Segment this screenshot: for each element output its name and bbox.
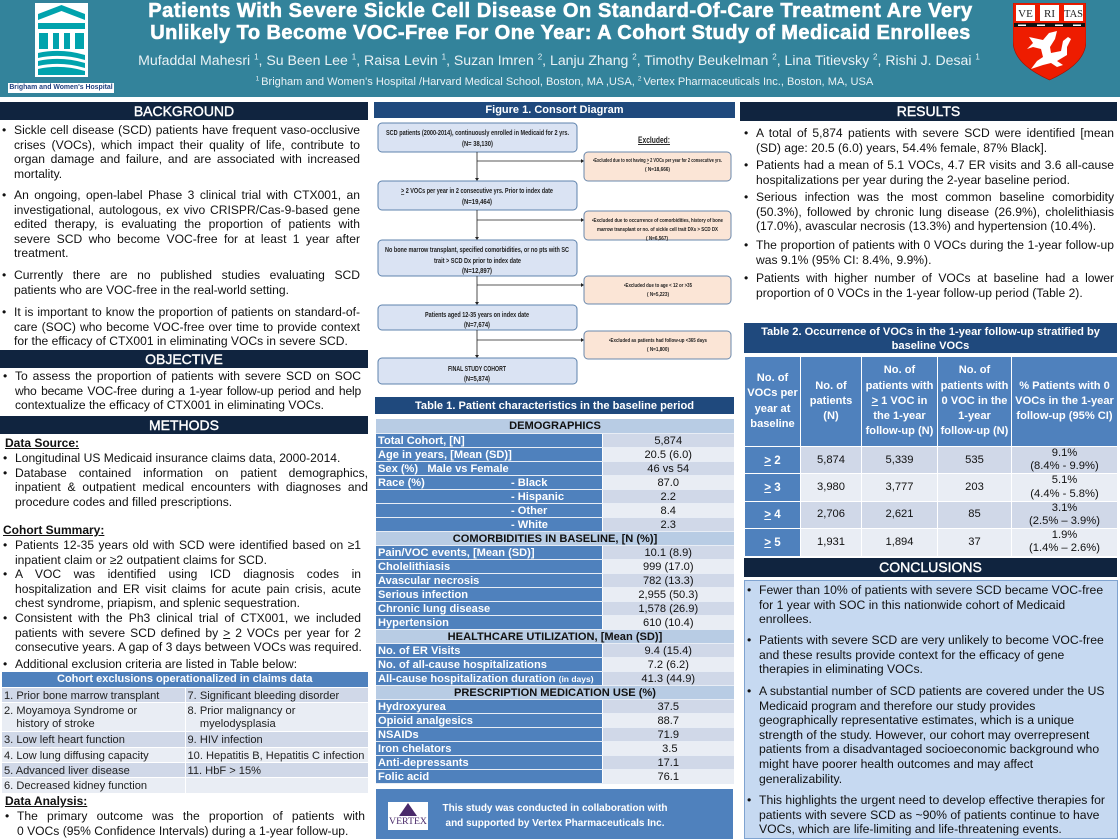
conclusions body: • bbox=[747, 684, 751, 698]
table: characteristics: Sex (%) Male vs Female bbox=[378, 463, 509, 475]
heading: methods: METHODS bbox=[149, 417, 219, 433]
text: data source: inpatient & outpatient medical encounters with diagnoses and bbox=[15, 480, 368, 494]
icon: Vertex logo: VERTEX bbox=[389, 816, 428, 826]
table: stratified VOCs: (8.4% - 9.9%) bbox=[1030, 460, 1099, 472]
text: urgent need: patients with severe SCD as ~90% of patients continue to have bbox=[759, 808, 1099, 822]
table: characteristics: 2.2 bbox=[661, 491, 676, 503]
text: very unlikely: and these results provide context for the efficacy of gene bbox=[759, 648, 1064, 662]
table: characteristics: 8.4 bbox=[661, 505, 676, 517]
table: stratified VOCs: (2.5% – 3.9%) bbox=[1029, 515, 1100, 527]
table: characteristics: 999 (17.0) bbox=[643, 561, 694, 573]
panel: methods: • bbox=[3, 451, 7, 465]
flow diagram: marrow transplant or no. of sickle cell trait DXs > SCD DX bbox=[597, 227, 718, 233]
table: cohort exclusions: 3. Low left heart function bbox=[4, 734, 125, 746]
table: stratified VOCs: follow-up (N) bbox=[941, 425, 1008, 437]
flow diagram: (N=7,674) bbox=[464, 322, 490, 329]
panel: background: • bbox=[2, 188, 6, 202]
conclusions body: • bbox=[747, 633, 751, 647]
text: cohort summary: Consistent with the Ph3 clinical trial of CTX001, we included bbox=[15, 611, 361, 625]
table: characteristics: Age in years, [Mean (SD)] bbox=[378, 449, 512, 461]
table: stratified VOCs: the 1-year bbox=[873, 410, 926, 422]
heading: table 2: Table 2. Occurrence of VOCs in the 1-year follow-up stratified by bbox=[761, 326, 1100, 338]
text: data analysis bbox=[5, 809, 365, 838]
panel: figure 1 consort diagram bbox=[374, 102, 735, 384]
table: characteristics: 10.1 (8.9) bbox=[644, 547, 692, 559]
text: SCD overview: Sickle cell disease (SCD) patients have frequent vaso-occlusive bbox=[14, 123, 360, 137]
table: characteristics: No. of ER Visits bbox=[378, 645, 460, 657]
table: characteristics: 9.4 (15.4) bbox=[644, 645, 692, 657]
text: importance bbox=[2, 305, 360, 348]
table: cohort exclusions: 6. Decreased kidney function bbox=[4, 780, 147, 792]
flow diagram: ( N=18,666) bbox=[645, 167, 670, 173]
text: phase 3 trial: treatment. bbox=[14, 246, 68, 260]
table: cohort exclusions: 9. HIV infection bbox=[188, 734, 263, 746]
table: characteristics: 37.5 bbox=[657, 701, 679, 713]
text: comorbidities: (50.3%), followed by chronic lung disease (26.9%), cholelithiasis bbox=[756, 205, 1114, 219]
flow diagram: (N=5,874) bbox=[464, 376, 490, 383]
table: characteristics: PRESCRIPTION MEDICATION USE (%) bbox=[454, 687, 656, 699]
table: stratified VOCs: 2,706 bbox=[817, 508, 845, 520]
table: stratified VOCs: No. of bbox=[884, 364, 915, 376]
icon: Harvard shield: VE bbox=[1018, 8, 1033, 20]
text: phase 3 trial bbox=[2, 188, 360, 260]
panel: table 1 patient characteristics bbox=[375, 397, 734, 784]
table: characteristics: 1,578 (26.9) bbox=[638, 603, 698, 615]
table: stratified VOCs: (N) bbox=[823, 410, 839, 422]
authors: Mufaddal Mahesri 1, Su Been Lee 1, Raisa Levin 1, Suzan Imren 2, Lanju Zhang 2, Timothy Beukelman 2, Lina Titievsky 2, Rishi J. Desai 1 bbox=[138, 52, 980, 68]
table: characteristics: 5,874 bbox=[654, 435, 682, 447]
table: stratified VOCs: 3.1% bbox=[1052, 502, 1077, 514]
logo caption: Brigham and Women's Hospital bbox=[9, 84, 113, 91]
table: characteristics: - Black bbox=[511, 477, 547, 489]
flow diagram bbox=[378, 122, 732, 384]
panel: results: • bbox=[744, 158, 748, 172]
text: no published studies bbox=[2, 268, 360, 297]
table: characteristics: DEMOGRAPHICS bbox=[509, 420, 601, 432]
text: cohort summary: chest syndrome, priapism, and splenic sequestration. bbox=[15, 596, 300, 610]
text: fewer than 10%: for 1 year with SOC in this nationwide cohort of Medicaid bbox=[759, 598, 1065, 612]
table: cohort exclusions: history of stroke bbox=[16, 718, 95, 730]
panel: results bbox=[740, 102, 1117, 300]
conclusions body: • bbox=[747, 793, 751, 807]
table: stratified VOCs: VOCs per bbox=[747, 387, 798, 399]
text: cohort summary: A VOC was identified using ICD diagnosis codes in bbox=[15, 567, 361, 581]
heading: figure 1: Figure 1. Consort Diagram bbox=[485, 104, 624, 116]
text: very unlikely bbox=[747, 633, 1104, 676]
table: stratified VOCs: No. of bbox=[959, 364, 990, 376]
table: characteristics: Race (%) bbox=[378, 477, 425, 489]
table: cohort exclusions: Cohort exclusions operationalized in claims data bbox=[57, 673, 313, 685]
text: data source: procedure codes and filled prescriptions. bbox=[15, 495, 232, 509]
text: Medicaid strength: might have poorer health outcomes and may affect bbox=[759, 757, 1033, 771]
table: stratified VOCs: 5.1% bbox=[1052, 474, 1077, 486]
table: stratified VOCs: (1.4% – 2.6%) bbox=[1029, 542, 1100, 554]
text: patient count: (SD) age: 20.5 (6.0) years, 54.4% female, 87% Black]. bbox=[756, 141, 1047, 155]
table: characteristics: NSAIDs bbox=[378, 729, 419, 741]
table: cohort exclusions: 7. Significant bleeding disorder bbox=[188, 690, 339, 702]
table: characteristics: COMORBIDITIES IN BASELINE, [N (%)] bbox=[453, 533, 657, 545]
table: stratified VOCs: baseline bbox=[750, 418, 795, 430]
table: stratified VOCs: patients bbox=[810, 395, 852, 407]
heading: table 1: Table 1. Patient characteristics in the baseline period bbox=[415, 400, 694, 412]
panel: methods: • bbox=[3, 567, 7, 581]
text: patient count bbox=[744, 126, 1114, 155]
table: characteristics: 87.0 bbox=[657, 477, 679, 489]
text: phase 3 trial: edited therapy, is evaluating the proportion of patients with bbox=[14, 217, 360, 231]
table: stratified VOCs: follow-up (95% CI) bbox=[1016, 410, 1113, 422]
table: characteristics: 88.7 bbox=[657, 715, 679, 727]
table: stratified VOCs: > 4 bbox=[764, 508, 781, 521]
text: baseline VOCs bbox=[744, 158, 1114, 187]
flow diagram: No bone marrow transplant, specified comorbidities, or no pts with SC bbox=[385, 247, 569, 254]
text: Medicaid strength: A substantial number of SCD patients are covered under the US bbox=[759, 684, 1105, 698]
text: Medicaid strength: patients from a disadvantaged socioeconomic background who bbox=[759, 742, 1099, 756]
table: stratified VOCs: 37 bbox=[968, 536, 981, 548]
panel: background: • bbox=[2, 123, 6, 137]
panel: methods: • bbox=[3, 466, 7, 480]
text: data analysis: The primary outcome was the proportion of patients with bbox=[17, 809, 365, 823]
heading: cohort summary: Cohort Summary: bbox=[3, 523, 104, 537]
table: characteristics: Hydroxyurea bbox=[378, 701, 446, 713]
table: characteristics: 610 (10.4) bbox=[643, 617, 694, 629]
title bbox=[148, 0, 973, 44]
heading: results: RESULTS bbox=[897, 103, 960, 119]
text: Medicaid strength: geographically representative estimates, which is a unique bbox=[759, 713, 1074, 727]
table: stratified VOCs: follow-up (N) bbox=[866, 425, 933, 437]
table: stratified VOCs: 5,339 bbox=[886, 454, 914, 466]
table: stratified VOCs: 3,980 bbox=[817, 481, 845, 493]
heading: objective: OBJECTIVE bbox=[145, 351, 223, 367]
text: SCD overview: mortality. bbox=[14, 167, 62, 181]
text: higher VOCs: proportion of 0 VOCs in the 1-year follow-up period (Table 2). bbox=[756, 286, 1083, 300]
table: characteristics: Avascular necrosis bbox=[378, 575, 479, 587]
heading: conclusions bbox=[744, 558, 1117, 577]
text: objective bbox=[3, 369, 361, 412]
text: urgent need: This highlights the urgent need to develop effective therapies for bbox=[759, 793, 1105, 807]
logo caption bbox=[8, 83, 114, 93]
flow diagram: •Excluded due to occurrence of comorbidities, history of bone bbox=[592, 218, 723, 224]
heading: table 2 bbox=[744, 323, 1117, 353]
table: stratified VOCs: 9.1% bbox=[1052, 447, 1077, 459]
text: objective: To assess the proportion of patients with severe SCD on SOC bbox=[15, 369, 361, 383]
table: stratified VOCs: 1.9% bbox=[1052, 529, 1077, 541]
flow diagram: •Excluded as patients had follow-up <365 days bbox=[609, 338, 707, 344]
text: proportion with 0 VOCs: was 9.1% (95% CI: 8.4%, 9.9%). bbox=[756, 253, 931, 267]
table: cohort exclusions: 2. Moyamoya Syndrome or bbox=[4, 705, 137, 717]
text: proportion with 0 VOCs bbox=[744, 238, 1114, 267]
text: Medicaid strength: generalizability. bbox=[759, 772, 842, 786]
table: stratified VOCs: 1,931 bbox=[817, 536, 845, 548]
heading: table 2: baseline VOCs bbox=[892, 340, 969, 352]
panel: methods: • bbox=[3, 538, 7, 552]
icon: Harvard shield bbox=[1013, 3, 1086, 80]
heading: data analysis: Data Analysis: bbox=[5, 794, 87, 808]
panel: vertex acknowledgement bbox=[376, 789, 733, 839]
table: stratified VOCs: 0 VOC in the bbox=[942, 395, 1007, 407]
heading: background bbox=[0, 102, 368, 120]
table: cohort exclusions: 11. HbF > 15% bbox=[188, 765, 261, 777]
text: very unlikely: therapies in eliminating VOCs. bbox=[759, 662, 923, 676]
table: characteristics: 782 (13.3) bbox=[643, 575, 694, 587]
table: stratified VOCs: > 3 bbox=[764, 481, 781, 494]
heading: background: BACKGROUND bbox=[134, 103, 234, 119]
text: cohort summary: Additional exclusion criteria are listed in Table below: bbox=[15, 657, 297, 671]
icon: Vertex logo bbox=[388, 802, 428, 830]
flow diagram: FINAL STUDY COHORT bbox=[448, 366, 507, 373]
text: objective: contextualize the efficacy of CTX001 in eliminating VOCs. bbox=[15, 398, 324, 412]
table: stratified VOCs: 3,777 bbox=[886, 481, 914, 493]
text: urgent need: VOCs, which are life-limiting and life-threatening events. bbox=[759, 822, 1062, 836]
table: stratified VOCs: No. of bbox=[757, 372, 788, 384]
text: patient count: A total of 5,874 patients with severe SCD were identified [mean bbox=[756, 126, 1114, 140]
table: characteristics: 2.3 bbox=[661, 519, 676, 531]
text: cohort summary: consecutive years. A gap of 3 days between VOCs was required. bbox=[15, 640, 362, 654]
table: stratified VOCs: year at bbox=[755, 402, 790, 414]
text: urgent need bbox=[747, 793, 1105, 836]
flow diagram: ( N=5,223) bbox=[647, 292, 669, 298]
table: characteristics: Serious infection bbox=[378, 589, 468, 601]
flow diagram: > 2 VOCs per year in 2 consecutive yrs. Prior to index date bbox=[401, 188, 553, 195]
text: study collaboration note bbox=[442, 803, 668, 829]
text: Medicaid strength: strength of the study. However, our cohort may overrepresent bbox=[759, 728, 1089, 742]
table: characteristics: Chronic lung disease bbox=[378, 603, 490, 615]
panel: results: • bbox=[744, 126, 748, 140]
text: fewer than 10%: Fewer than 10% of patients with severe SCD became VOC-free bbox=[759, 583, 1103, 597]
title: Unlikely To Become VOC-Free For One Year: A Cohort Study of Medicaid Enrollees bbox=[150, 22, 971, 44]
table: characteristics: HEALTHCARE UTILIZATION, [Mean (SD)] bbox=[448, 631, 662, 643]
table: stratified VOCs: 1,894 bbox=[886, 536, 914, 548]
table: characteristics: Opioid analgesics bbox=[378, 715, 473, 727]
table: characteristics: Folic acid bbox=[378, 771, 429, 783]
panel: table 2 VOC occurrence bbox=[744, 323, 1117, 556]
table: characteristics: Hypertension bbox=[378, 617, 449, 629]
table: stratified VOCs: VOCs in the 1-year bbox=[1015, 395, 1114, 407]
heading: conclusions: CONCLUSIONS bbox=[879, 559, 982, 575]
header banner bbox=[0, 0, 1120, 97]
flow diagram: (N=19,464) bbox=[462, 199, 492, 206]
panel: methods: • bbox=[5, 809, 9, 823]
heading: methods bbox=[0, 416, 368, 434]
flow diagram: Patients aged 12-35 years on index date bbox=[425, 312, 529, 319]
table: characteristics: 41.3 (44.9) bbox=[641, 673, 695, 685]
text: importance: for the efficacy of CTX001 in eliminating VOCs in severe SCD. bbox=[14, 334, 348, 348]
table: characteristics: No. of all-cause hospitalizations bbox=[378, 659, 547, 671]
table: cohort exclusions: 5. Advanced liver disease bbox=[4, 765, 130, 777]
icon: Harvard shield: TAS bbox=[1064, 9, 1083, 20]
table: cohort exclusions: 8. Prior malignancy or bbox=[188, 705, 295, 717]
flow diagram: (N=12,897) bbox=[462, 268, 492, 275]
panel: methods bbox=[0, 416, 368, 838]
flow diagram: trait > SCD Dx prior to index date bbox=[434, 258, 521, 265]
flow diagram: •Excluded due to age < 12 or >35 bbox=[624, 283, 692, 289]
text: phase 3 trial: investigational, autologous, ex vivo CRISPR/Cas-9-based gene bbox=[14, 203, 360, 217]
panel: results: • bbox=[744, 238, 748, 252]
text: fewer than 10%: enrollees. bbox=[759, 612, 812, 626]
panel: background bbox=[0, 102, 368, 348]
text: cohort summary bbox=[3, 538, 362, 671]
table: stratified VOCs: No. of bbox=[815, 380, 847, 392]
heading: table 1 bbox=[375, 397, 734, 414]
text: cohort summary: hospitalization and ER visit claims for acute pain crisis, acute bbox=[15, 582, 361, 596]
text: importance: care (SOC) who become VOC-free over time to provide context bbox=[14, 320, 360, 334]
table: characteristics: Total Cohort, [N] bbox=[378, 435, 465, 447]
table: stratified VOCs: 85 bbox=[968, 508, 981, 520]
table: stratified VOCs bbox=[745, 357, 1117, 556]
table: stratified VOCs: 5,874 bbox=[817, 454, 845, 466]
text: proportion with 0 VOCs: The proportion of patients with 0 VOCs during the 1-year follow-up bbox=[756, 238, 1114, 252]
text: higher VOCs: Patients with higher number of VOCs at baseline had a lower bbox=[756, 271, 1114, 285]
icon: Brigham and Women's Hospital logo bbox=[35, 3, 88, 77]
table: stratified VOCs: patients with bbox=[866, 380, 933, 392]
table: stratified VOCs: 1-year bbox=[958, 410, 991, 422]
panel: results: • bbox=[744, 190, 748, 204]
table: characteristics: Anti-depressants bbox=[378, 757, 469, 769]
heading: data source: Data Source: bbox=[5, 436, 79, 450]
table: cohort exclusions: 10. Hepatitis B, Hepatitis C infection bbox=[188, 750, 364, 762]
text: comorbidities bbox=[744, 190, 1114, 233]
text: no published studies: patients who are VOC-free in the real-world setting. bbox=[14, 283, 289, 297]
text: data analysis: 0 VOCs (95% Confidence Intervals) during a 1-year follow-up. bbox=[17, 824, 348, 838]
affiliations: 1 Brigham and Women's Hospital /Harvard Medical School, Boston, MA ,USA, 2 Vertex Pharmaceuticals Inc., Boston, MA, USA bbox=[256, 75, 873, 88]
panel: results: • bbox=[744, 271, 748, 285]
text: SCD overview: organ damage and failure, and are associated with increased bbox=[14, 152, 360, 166]
flow diagram: ( N=6,567) bbox=[646, 236, 668, 242]
icon: Harvard shield: RI bbox=[1044, 8, 1055, 20]
table: characteristics: 71.9 bbox=[657, 729, 679, 741]
flow diagram: Excluded: bbox=[638, 135, 670, 146]
text: cohort summary: patients with severe SCD defined by > 2 VOCs per year for 2 bbox=[15, 626, 361, 640]
text: comorbidities: (17.0%), avascular necrosis (13.3%) and hypertension (10.4%). bbox=[756, 219, 1096, 233]
table: characteristics: 20.5 (6.0) bbox=[644, 449, 692, 461]
panel: methods: • bbox=[3, 657, 7, 671]
table: stratified VOCs: patients with bbox=[941, 380, 1008, 392]
table: characteristics: All-cause hospitalization duration (in days) bbox=[378, 673, 594, 685]
text: cohort summary: inpatient claim or ≥2 outpatient claims for SCD. bbox=[15, 553, 267, 567]
text: comorbidities: Serious infection was the most common baseline comorbidity bbox=[756, 190, 1114, 204]
flow diagram: ( N=1,800) bbox=[647, 347, 669, 353]
table: characteristics: - Other bbox=[511, 505, 547, 517]
text: data source: Database contained information on patient demographics, bbox=[15, 466, 368, 480]
table: stratified VOCs: % Patients with 0 bbox=[1019, 380, 1110, 392]
table: cohort exclusions: myelodysplasia bbox=[200, 718, 276, 730]
table: characteristics: 7.2 (6.2) bbox=[648, 659, 689, 671]
table: characteristics: Cholelithiasis bbox=[378, 561, 450, 573]
heading: figure 1 bbox=[374, 102, 735, 118]
table: stratified VOCs: 203 bbox=[965, 481, 984, 493]
table: characteristics: - Hispanic bbox=[511, 491, 564, 503]
text: SCD overview: crises (VOCs), which impact their quality of life, contribute to bbox=[14, 138, 360, 152]
title: Patients With Severe Sickle Cell Disease On Standard-Of-Care Treatment Are Very bbox=[148, 0, 973, 22]
table: characteristics: 3.5 bbox=[662, 743, 678, 755]
table: stratified VOCs: 535 bbox=[965, 454, 984, 466]
table: characteristics: - White bbox=[511, 519, 548, 531]
table: stratified VOCs: (4.4% - 5.8%) bbox=[1030, 488, 1099, 500]
text: data source bbox=[3, 451, 368, 509]
table: characteristics: Pain/VOC events, [Mean (SD)] bbox=[378, 547, 535, 559]
table: stratified VOCs: > 1 VOC in bbox=[872, 395, 927, 407]
table: characteristics: 76.1 bbox=[657, 771, 679, 783]
text: very unlikely: Patients with severe SCD are very unlikely to become VOC-free bbox=[759, 633, 1104, 647]
text: cohort summary: Patients 12-35 years old with SCD were identified based on ≥1 bbox=[15, 538, 361, 552]
table: characteristics: Iron chelators bbox=[378, 743, 451, 755]
panel: methods: • bbox=[3, 611, 7, 625]
text: data source: Longitudinal US Medicaid insurance claims data, 2000-2014. bbox=[15, 451, 340, 465]
table: cohort exclusions bbox=[2, 672, 368, 793]
text: Medicaid strength bbox=[747, 684, 1105, 786]
flow diagram: SCD patients (2000-2014), continuously enrolled in Medicaid for 2 yrs. bbox=[386, 130, 569, 137]
text: baseline VOCs: hospitalizations per year during the 2-year baseline period. bbox=[756, 173, 1070, 187]
table: stratified VOCs: > 5 bbox=[764, 536, 781, 549]
conclusions body: • bbox=[747, 583, 751, 597]
text: Medicaid strength: Medicaid program and therefore our study provides bbox=[759, 699, 1035, 713]
table: characteristics: 46 vs 54 bbox=[647, 463, 689, 475]
text: SCD overview bbox=[2, 123, 360, 181]
text: study collaboration note: and supported by Vertex Pharmaceuticals Inc. bbox=[446, 818, 664, 829]
panel: background: • bbox=[2, 305, 6, 319]
table: stratified VOCs: 2,621 bbox=[886, 508, 914, 520]
heading: results bbox=[740, 102, 1117, 121]
flow diagram: •Excluded due to not having > 2 VOCs per year for 2 consecutive yrs. bbox=[593, 158, 722, 164]
panel: objective bbox=[0, 350, 368, 412]
text: study collaboration note: This study was conducted in collaboration with bbox=[442, 803, 668, 814]
text: no published studies: Currently there are no published studies evaluating SCD bbox=[14, 268, 360, 282]
table: cohort exclusions: 1. Prior bone marrow transplant bbox=[4, 690, 159, 702]
conclusions body bbox=[744, 580, 1118, 839]
text: phase 3 trial: severe SCD who become VOC-free for at least 1 year after bbox=[14, 232, 360, 246]
panel: objective: • bbox=[3, 369, 7, 383]
table: stratified VOCs: > 2 bbox=[764, 454, 781, 467]
panel: background: • bbox=[2, 268, 6, 282]
text: fewer than 10% bbox=[747, 583, 1103, 626]
panel: conclusions bbox=[744, 558, 1118, 839]
text: objective: who became VOC-free during a 1-year follow-up period and help bbox=[15, 384, 361, 398]
text: baseline VOCs: Patients had a mean of 5.1 VOCs, 4.7 ER visits and 3.6 all-cause bbox=[756, 158, 1114, 172]
text: higher VOCs bbox=[744, 271, 1114, 300]
flow diagram: (N= 38,130) bbox=[462, 141, 493, 148]
table: cohort exclusions: 4. Low lung diffusing capacity bbox=[4, 750, 149, 762]
heading: objective bbox=[0, 350, 368, 368]
table: characteristics bbox=[376, 419, 734, 784]
table: characteristics: 17.1 bbox=[657, 757, 679, 769]
text: phase 3 trial: An ongoing, open-label Phase 3 clinical trial with CTX001, an bbox=[14, 188, 360, 202]
table: characteristics: 2,955 (50.3) bbox=[638, 589, 698, 601]
text: importance: It is important to know the proportion of patients on standard-of- bbox=[14, 305, 360, 319]
